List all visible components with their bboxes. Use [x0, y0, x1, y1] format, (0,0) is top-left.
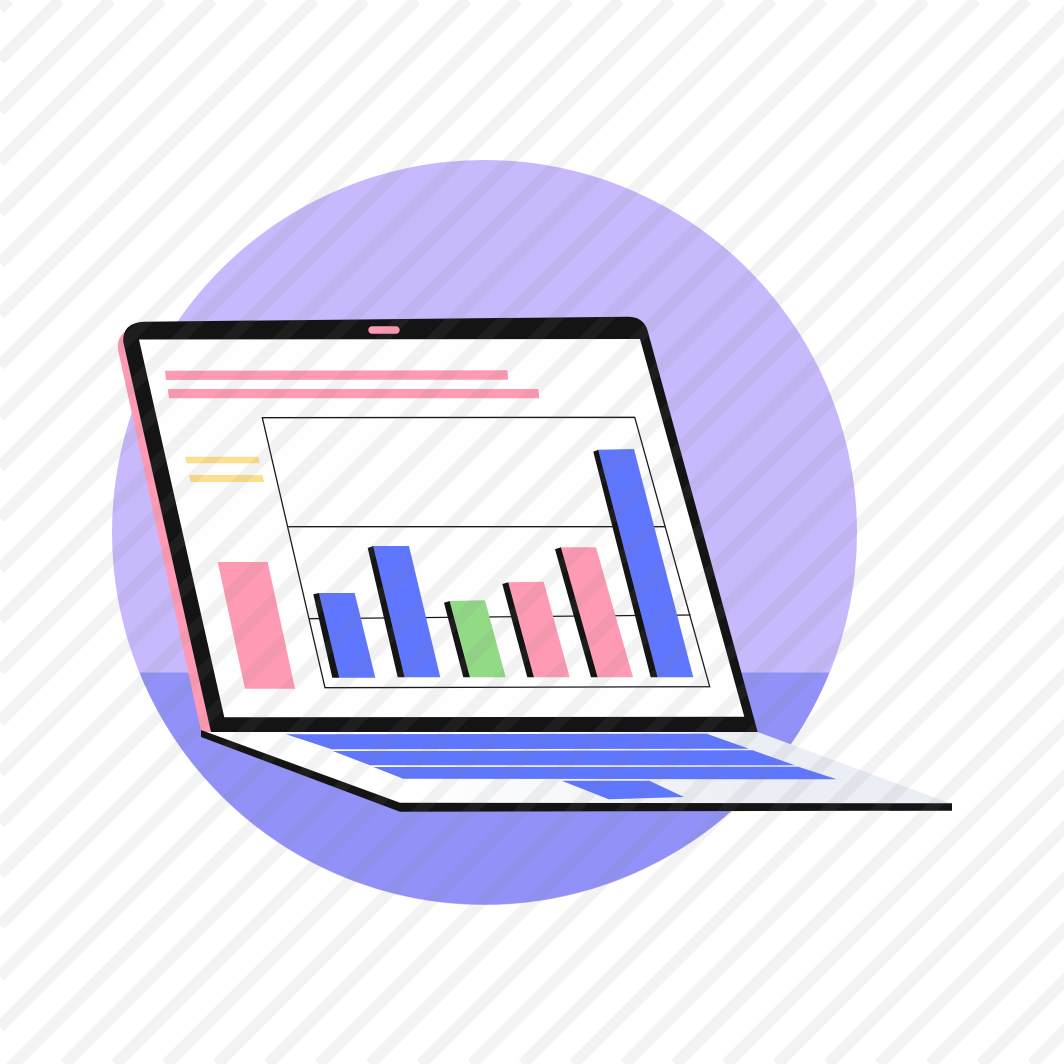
heading lines — [165, 370, 539, 398]
chart frame and grid — [262, 417, 710, 688]
bar: blue 1 — [313, 593, 375, 678]
laptop lid edge — [118, 330, 220, 733]
laptop base edge — [201, 730, 952, 812]
keyboard rows — [286, 734, 837, 779]
background circle — [112, 160, 857, 905]
bar: pink 1 — [502, 582, 570, 677]
bar: blue 3 — [593, 449, 693, 677]
bar: green — [444, 600, 506, 677]
legend lines — [185, 457, 264, 482]
touchpad — [562, 781, 684, 799]
laptop lid frame — [123, 317, 758, 732]
bar: pink 2 — [555, 547, 633, 677]
laptop screen — [139, 339, 744, 717]
large pink bar — [218, 562, 295, 689]
bar: blue 2 — [368, 546, 440, 677]
laptop — [118, 317, 952, 812]
webcam — [368, 326, 400, 334]
